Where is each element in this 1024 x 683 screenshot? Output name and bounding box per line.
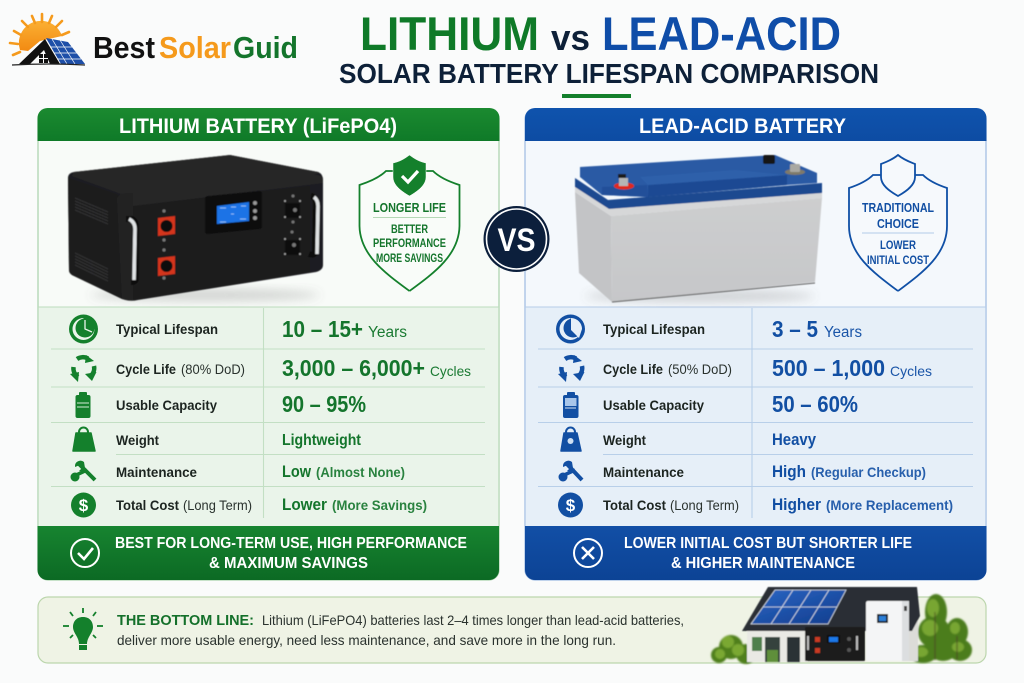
trees [711,594,972,664]
panel: bottom line [38,587,986,664]
panel: bottom line: Lithium (LiFePO4) batteries last 2–4 times longer than lead-acid batteries, [262,612,684,628]
icon: recycle [70,355,96,382]
title [339,7,879,98]
value: lifespan: 10 – 15+ [282,316,363,342]
icon: weight [561,428,581,451]
title: LITHIUM [360,7,539,60]
value: lifespan: Years [368,324,407,341]
value: capacity: 90 – 95% [282,391,366,417]
lithium comparison table [51,308,485,518]
lead-acid shield badge: CHOICE [877,217,919,231]
icon: dollar [71,492,96,518]
value: maintenance: Low [282,462,312,481]
title: SOLAR BATTERY LIFESPAN COMPARISON [339,58,879,89]
icon: dollar: $ [566,496,576,515]
value: weight: Lightweight [282,432,361,449]
lead-acid header: LEAD-ACID BATTERY [639,115,846,138]
title: vs [551,17,590,58]
lead-acid shield badge: LOWER [880,238,916,252]
label: maintenance: Maintenance [116,464,197,480]
icon: dollar: $ [79,496,89,515]
lithium footer [38,526,499,580]
lead-acid shield badge [849,155,947,291]
logo [10,14,298,65]
logo text: Solar [159,30,231,65]
value: cycles: Cycles [430,363,471,379]
icon: x circle [574,539,602,567]
lithium shield badge: MORE SAVINGS [376,253,443,265]
icon: check circle [71,539,99,567]
icon: sun and solar house [10,14,85,65]
panel: lithium battery [38,108,500,580]
logo text: Guid [233,30,298,65]
label: total cost: (Long Term) [670,497,739,513]
lead-acid footer [525,526,986,580]
lithium header: LITHIUM BATTERY (LiFePO4) [119,115,397,138]
lead-acid footer: LOWER INITIAL COST BUT SHORTER LIFE [624,535,912,552]
value: cost: (More Savings) [332,497,427,513]
value: cycles: 3,000 – 6,000+ [282,355,425,381]
red connectors [158,216,175,236]
value: lifespan: 3 – 5 [772,316,818,342]
value: maintenance: (Almost None) [316,464,405,480]
value: cost: (More Replacement) [826,497,953,513]
vs badge [484,206,550,272]
label: total cost: (Long Term) [183,497,252,513]
icon: clock [556,314,585,344]
label: usable capacity: Usable Capacity [116,397,217,413]
bottom line text: THE BOTTOM LINE: [117,613,254,629]
icon: dollar [558,492,583,518]
label: cycle life: (80% DoD) [181,361,245,377]
value: maintenance: High [772,462,806,481]
panel: lead-acid battery [525,108,986,580]
icon: wrench [70,461,95,482]
lithium shield badge: PERFORMANCE [373,236,446,250]
icon: battery [76,392,90,418]
icon: recycle [558,355,584,382]
lithium footer: & MAXIMUM SAVINGS [209,555,368,572]
lead-acid footer: & HIGHER MAINTENANCE [671,555,855,572]
handles [126,219,136,282]
icon: battery [563,392,578,418]
display [205,191,262,234]
icon: clock [69,314,98,344]
panel: bottom line: deliver more usable energy, need less maintenance, and save more in the long run. [117,632,616,648]
value: cycles: 500 – 1,000 [772,355,885,381]
lithium shield badge [360,155,460,291]
lead-acid shield badge: TRADITIONAL [862,201,934,215]
house with solar and batteries [711,587,972,664]
label: weight: Weight [603,432,646,448]
logo text: Best [93,30,155,65]
lead-acid header [525,108,986,141]
upper lid [580,155,817,197]
icon: weight [73,428,95,451]
label: typical lifespan: Typical Lifespan [603,321,705,337]
value: capacity: 50 – 60% [772,391,858,417]
value: lifespan: Years [824,324,862,341]
label: weight: Weight [116,432,159,448]
lead-acid battery image [575,155,822,302]
lithium footer: BEST FOR LONG-TERM USE, HIGH PERFORMANCE [115,535,467,552]
value: cost: Lower [282,495,327,514]
label: cycle life: (50% DoD) [668,361,732,377]
lithium shield badge: LONGER LIFE [373,200,446,215]
label: usable capacity: Usable Capacity [603,397,704,413]
label: cycle life: Cycle Life [603,361,663,377]
right connectors [285,203,300,218]
lead-acid shield badge: INITIAL COST [867,253,930,267]
value: maintenance: (Regular Checkup) [811,464,926,480]
lead-acid comparison table [538,308,973,518]
title: LEAD-ACID [602,7,841,60]
value: cycles: Cycles [890,363,932,379]
label: total cost: Total Cost [116,497,179,513]
label: total cost: Total Cost [603,497,666,513]
label: maintenance: Maintenance [603,464,684,480]
vs badge: VS [498,222,536,258]
lithium shield badge: BETTER [391,222,428,236]
label: typical lifespan: Typical Lifespan [116,321,218,337]
icon: wrench [558,461,582,482]
label: cycle life: Cycle Life [116,361,176,377]
value: weight: Heavy [772,431,817,449]
lithium battery image [68,155,323,301]
icon: light bulb [63,608,103,650]
rim [575,178,822,209]
lithium header [38,108,500,141]
value: cost: Higher [772,495,821,514]
